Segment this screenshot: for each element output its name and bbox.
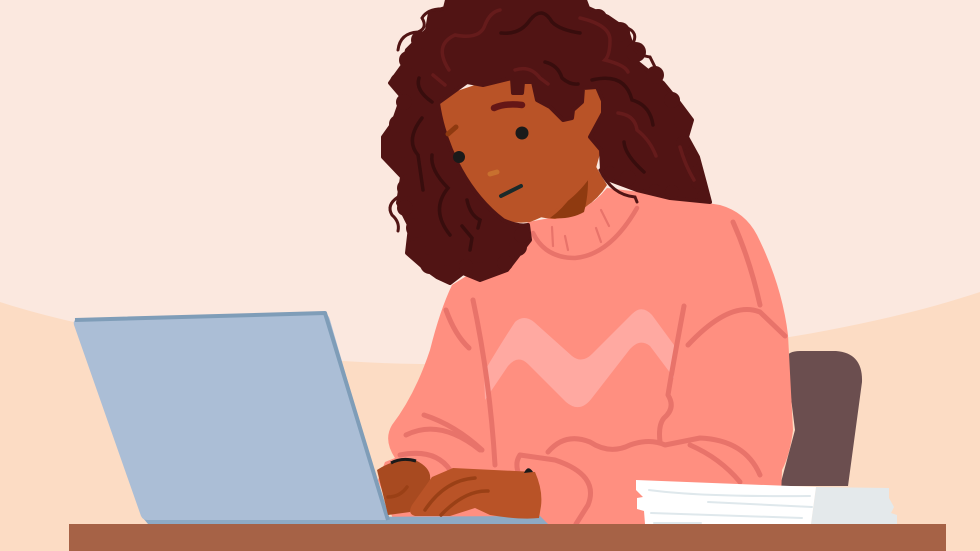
hair curl details xyxy=(412,13,653,250)
face xyxy=(430,70,610,223)
sweater fold lines xyxy=(400,222,785,524)
hair curly scallops xyxy=(381,9,709,283)
sweater zigzag pattern xyxy=(484,309,674,407)
neck shadow xyxy=(550,165,588,218)
sweater xyxy=(378,188,793,524)
far hand nails xyxy=(391,459,416,463)
left hand xyxy=(377,460,430,515)
desk xyxy=(69,524,946,551)
finger lines xyxy=(388,478,488,515)
right hand xyxy=(410,468,541,519)
loose hair strands xyxy=(390,9,655,231)
background sand hill xyxy=(0,292,980,551)
wrist nail xyxy=(524,468,533,473)
sweater collar xyxy=(533,208,637,258)
laptop screen xyxy=(74,313,388,520)
far eyebrow xyxy=(448,127,456,134)
eyes xyxy=(453,126,528,163)
laptop base xyxy=(143,516,548,524)
chair xyxy=(780,351,862,486)
paper stack xyxy=(636,480,897,524)
mouth xyxy=(501,186,521,196)
eyebrow xyxy=(494,104,522,108)
laptop screen edge xyxy=(75,313,388,520)
neck xyxy=(535,165,607,219)
hair xyxy=(381,0,710,283)
nose xyxy=(490,172,497,174)
paper lines xyxy=(649,490,812,523)
